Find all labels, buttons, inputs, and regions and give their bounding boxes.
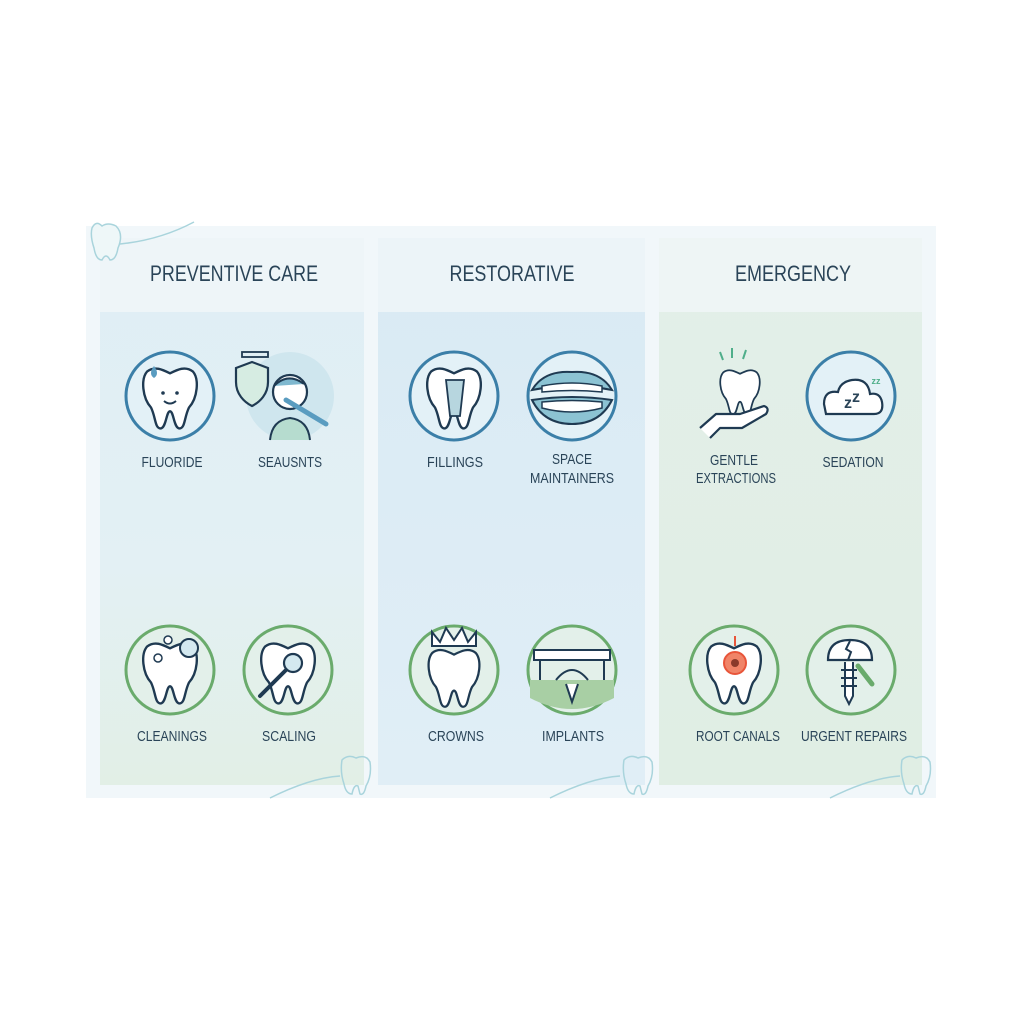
- label: fillings: FILLINGS: [427, 455, 483, 471]
- icon: sealants: [236, 352, 334, 440]
- icon: cleanings: [126, 626, 214, 714]
- label: cleanings: CLEANINGS: [137, 729, 207, 745]
- panel: emergency: EXTRACTIONS: [696, 471, 776, 487]
- label: scaling: SCALING: [262, 729, 316, 745]
- icon: gentle extractions: [700, 348, 768, 438]
- icon: implants: [528, 626, 616, 714]
- label: fluoride: FLUORIDE: [142, 455, 203, 471]
- label: gentle extractions: GENTLE: [710, 453, 758, 469]
- icon: root canals: [690, 626, 778, 714]
- icon: sedation: z: [844, 395, 852, 412]
- panel: emergency: [659, 238, 922, 785]
- icon: fluoride: [126, 352, 214, 440]
- outer frame: [86, 226, 936, 798]
- label: urgent repairs: URGENT REPAIRS: [801, 729, 907, 745]
- heading: preventive care: PREVENTIVE CARE: [150, 261, 318, 286]
- label: root canals: ROOT CANALS: [696, 729, 780, 745]
- label: sealants: SEAUSNTS: [258, 455, 322, 471]
- panel: preventive care: [100, 238, 364, 785]
- icon: crowns: [410, 626, 498, 714]
- heading: restorative: RESTORATIVE: [450, 261, 574, 286]
- panel: restorative: [378, 238, 645, 785]
- heading: emergency: EMERGENCY: [735, 261, 851, 286]
- decoration: corner teeth: [91, 222, 931, 798]
- icon: sedation: z: [852, 389, 860, 406]
- icon: scaling: [244, 626, 332, 714]
- icon: sedation: [807, 352, 895, 440]
- label: sedation: SEDATION: [822, 455, 884, 471]
- label: implants: IMPLANTS: [542, 729, 604, 745]
- icon: fillings: [410, 352, 498, 440]
- label: space maintainers: SPACE: [552, 452, 592, 468]
- icon: space maintainers: [528, 352, 616, 440]
- icon: sedation: zz: [872, 376, 881, 386]
- panel: restorative: MAINTAINERS: [530, 471, 614, 487]
- icon: urgent repairs: [807, 626, 895, 714]
- label: crowns: CROWNS: [428, 729, 484, 745]
